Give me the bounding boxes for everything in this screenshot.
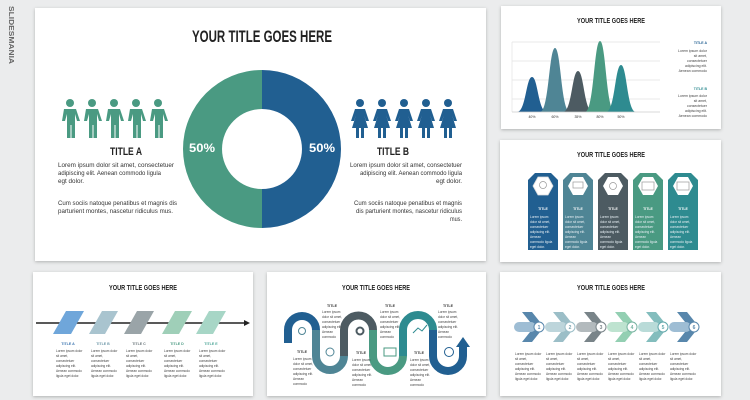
panel: ribbon timeline slide: consectetuer xyxy=(56,359,75,363)
step texts: ligula eget dolor. xyxy=(639,377,662,381)
chevrons: 4 xyxy=(631,325,634,331)
text block: title B: TITLE B xyxy=(377,146,409,158)
panel: hexagon cards slide: YOUR TITLE GOES HERE xyxy=(577,152,645,159)
labels: TITLE C xyxy=(132,342,146,346)
step texts: consectetuer xyxy=(438,320,457,324)
step texts: Aenean commodo xyxy=(639,372,665,376)
step texts: sit amet, xyxy=(515,357,527,361)
legend text: adipiscing elit. xyxy=(685,109,707,113)
step texts: consectetuer xyxy=(352,368,371,372)
panel: ribbon timeline slide: sit amet, xyxy=(91,354,103,358)
step texts: Lorem ipsum xyxy=(293,357,312,361)
panel: ribbon timeline slide: Lorem ipsum dolor xyxy=(199,349,226,353)
chevrons: 6 xyxy=(693,325,696,331)
panel: ribbon timeline slide: Aenean commodo xyxy=(91,369,117,373)
step texts: Aenean xyxy=(293,377,304,381)
step texts: Lorem ipsum dolor xyxy=(670,352,697,356)
cards: dolor sit amet, xyxy=(635,220,655,224)
text block: title B: egt dolor. xyxy=(436,179,462,185)
step texts: dolor sit amet, xyxy=(438,315,458,319)
legend text: sit amet, xyxy=(694,54,707,58)
step texts: consectetuer xyxy=(515,362,534,366)
panel: main slide xyxy=(35,8,486,261)
step texts: dolor sit amet, xyxy=(410,363,430,367)
panel: ribbon timeline slide: Lorem ipsum dolor xyxy=(164,349,191,353)
cards: dolor sit amet, xyxy=(600,220,620,224)
step texts: commodo xyxy=(438,335,452,339)
step texts: Lorem ipsum xyxy=(438,310,457,314)
panel: hexagon cards slide xyxy=(500,140,721,262)
cards: Aenean xyxy=(530,235,541,239)
chart: peaks: 50% xyxy=(617,115,625,119)
panel: ribbon timeline slide: ligula eget dolor. xyxy=(56,374,79,378)
step texts: ligula eget dolor. xyxy=(577,377,600,381)
step texts: TITLE xyxy=(297,350,308,354)
step texts: commodo xyxy=(380,335,394,339)
step texts: consectetuer xyxy=(608,362,627,366)
step texts: TITLE xyxy=(356,351,367,355)
donut chart xyxy=(183,70,341,228)
step texts: Aenean commodo xyxy=(546,372,572,376)
panel: wave process slide xyxy=(267,272,486,396)
text block: title A: parturient montes, nascetur ridiculus mus. xyxy=(58,209,173,215)
cards: Lorem ipsum xyxy=(635,215,654,219)
step texts: commodo xyxy=(352,383,366,387)
text block: title A xyxy=(58,146,177,215)
step texts: adipiscing elit. xyxy=(438,325,458,329)
donut chart: 50% xyxy=(309,141,335,155)
step texts: commodo xyxy=(410,383,424,387)
legend text: adipiscing elit. xyxy=(685,64,707,68)
cards: Aenean xyxy=(565,235,576,239)
step texts: Aenean xyxy=(322,330,333,334)
text block: title B: dis parturient montes, nascetur ridiculus xyxy=(356,209,462,215)
panel: chevron steps slide xyxy=(500,272,721,396)
panel: ribbon timeline slide: ligula eget dolor. xyxy=(126,374,149,378)
step texts: consectetuer xyxy=(293,367,312,371)
step texts: adipiscing elit. xyxy=(608,367,628,371)
step texts: consectetuer xyxy=(546,362,565,366)
panel: ribbon timeline slide: adipiscing elit. xyxy=(91,364,111,368)
panel: ribbon timeline slide: adipiscing elit. xyxy=(56,364,76,368)
cards: adipiscing elit. xyxy=(635,230,655,234)
panel: wave process slide: YOUR TITLE GOES HERE xyxy=(342,285,410,292)
panel: ribbon timeline slide: Lorem ipsum dolor xyxy=(126,349,153,353)
chart: peaks: 60% xyxy=(551,115,559,119)
step texts: Lorem ipsum dolor xyxy=(608,352,635,356)
panel: ribbon timeline slide: Aenean commodo xyxy=(164,369,190,373)
text block: title A: Cum sociis natoque penatibus et magnis dis xyxy=(58,201,177,207)
step texts: consectetuer xyxy=(577,362,596,366)
panel: ribbon timeline slide: adipiscing elit. xyxy=(164,364,184,368)
step texts: commodo xyxy=(293,382,307,386)
panel: ribbon timeline slide: sit amet, xyxy=(56,354,68,358)
panel: ribbon timeline slide: sit amet, xyxy=(164,354,176,358)
labels: TITLE A xyxy=(61,342,75,346)
cards: TITLE xyxy=(608,207,619,211)
panel: ribbon timeline slide xyxy=(33,272,253,396)
panel: ribbon timeline slide: ligula eget dolor. xyxy=(199,374,222,378)
cards: dolor sit amet, xyxy=(565,220,585,224)
labels: TITLE D xyxy=(170,342,184,346)
panel: ribbon timeline slide: Aenean commodo xyxy=(199,369,225,373)
step texts: dolor sit amet, xyxy=(322,315,342,319)
step texts: ligula eget dolor. xyxy=(546,377,569,381)
chevrons: 5 xyxy=(662,325,665,331)
step texts: ligula eget dolor. xyxy=(608,377,631,381)
panel: ribbon timeline slide: Lorem ipsum dolor xyxy=(91,349,118,353)
legend text: Lorem ipsum dolor xyxy=(678,94,708,98)
panel: ribbon timeline slide: sit amet, xyxy=(199,354,211,358)
cards: TITLE xyxy=(573,207,584,211)
cards: commodo ligula xyxy=(565,240,588,244)
panel: ribbon timeline slide: Aenean commodo xyxy=(126,369,152,373)
panel: ribbon timeline slide: consectetuer xyxy=(199,359,218,363)
cards: Lorem ipsum xyxy=(600,215,619,219)
step texts: Lorem ipsum dolor xyxy=(577,352,604,356)
text block: title B: adipiscing elit. Aenean commodo ligula xyxy=(360,171,463,177)
panel: ribbon timeline slide: adipiscing elit. xyxy=(199,364,219,368)
text block: title B: Lorem ipsum dolor sit amet, consectetuer xyxy=(350,163,462,169)
step texts: consectetuer xyxy=(670,362,689,366)
cards: commodo ligula xyxy=(670,240,693,244)
cards: dolor sit amet, xyxy=(670,220,690,224)
step texts: Aenean commodo xyxy=(608,372,634,376)
cards: TITLE xyxy=(538,207,549,211)
cards: adipiscing elit. xyxy=(670,230,690,234)
legend text: Lorem ipsum dolor xyxy=(678,49,708,53)
step texts: Lorem ipsum xyxy=(352,358,371,362)
panel: ribbon timeline slide: adipiscing elit. xyxy=(126,364,146,368)
cards: adipiscing elit. xyxy=(600,230,620,234)
panel: ribbon timeline slide: YOUR TITLE GOES HERE xyxy=(109,285,177,292)
cards: Aenean xyxy=(670,235,681,239)
panel: ribbon timeline slide: Aenean commodo xyxy=(56,369,82,373)
text block: title A: TITLE A xyxy=(110,146,142,158)
panel: ribbon timeline slide: consectetuer xyxy=(126,359,145,363)
step texts: TITLE xyxy=(414,351,425,355)
step texts: dolor sit amet, xyxy=(352,363,372,367)
cards: commodo ligula xyxy=(635,240,658,244)
step texts: Lorem ipsum xyxy=(322,310,341,314)
step texts xyxy=(515,352,697,381)
chevrons: 1 xyxy=(538,325,541,331)
step texts: adipiscing elit. xyxy=(639,367,659,371)
cards: adipiscing elit. xyxy=(565,230,585,234)
step texts: commodo xyxy=(322,335,336,339)
cards xyxy=(528,173,698,250)
donut chart: 50% xyxy=(189,141,215,155)
wave path xyxy=(288,315,463,371)
cards: eget dolor. xyxy=(600,245,615,249)
cards: commodo ligula xyxy=(530,240,553,244)
step texts: Lorem ipsum dolor xyxy=(515,352,542,356)
panel: peak chart slide xyxy=(501,6,721,129)
cards: dolor sit amet, xyxy=(530,220,550,224)
step texts: adipiscing elit. xyxy=(577,367,597,371)
chevrons: 2 xyxy=(569,325,572,331)
step texts: consectetuer xyxy=(322,320,341,324)
panel: peak chart slide: YOUR TITLE GOES HERE xyxy=(577,18,645,25)
cards: TITLE xyxy=(678,207,689,211)
panel: ribbon timeline slide: Lorem ipsum dolor xyxy=(56,349,83,353)
step texts: TITLE xyxy=(327,304,338,308)
legend text: consectetuer xyxy=(687,104,708,108)
step texts: consectetuer xyxy=(380,320,399,324)
chart: peaks: 80% xyxy=(596,115,604,119)
cards: consectetuer xyxy=(565,225,584,229)
step texts: adipiscing elit. xyxy=(380,325,400,329)
step texts: dolor sit amet, xyxy=(293,362,313,366)
step texts: sit amet, xyxy=(577,357,589,361)
chevrons: 3 xyxy=(600,325,603,331)
step texts: Lorem ipsum xyxy=(380,310,399,314)
step texts: Aenean xyxy=(410,378,421,382)
icon: women xyxy=(351,99,457,138)
cards: eget dolor. xyxy=(635,245,650,249)
step texts: consectetuer xyxy=(410,368,429,372)
cards: Lorem ipsum xyxy=(670,215,689,219)
labels: TITLE E xyxy=(204,342,218,346)
step texts: adipiscing elit. xyxy=(515,367,535,371)
step texts: Aenean xyxy=(380,330,391,334)
panel: ribbon timeline slide: sit amet, xyxy=(126,354,138,358)
cards: Lorem ipsum xyxy=(530,215,549,219)
step texts: dolor sit amet, xyxy=(380,315,400,319)
text block: title A: egt dolor. xyxy=(58,179,84,185)
panel: ribbon timeline slide: ligula eget dolor. xyxy=(91,374,114,378)
step texts: Aenean xyxy=(438,330,449,334)
icon: men xyxy=(62,99,168,138)
chart: peaks xyxy=(512,41,660,119)
arrowhead xyxy=(456,337,470,347)
step texts: Lorem ipsum xyxy=(410,358,429,362)
step texts: ligula eget dolor. xyxy=(670,377,693,381)
legend text: sit amet, xyxy=(694,99,707,103)
step texts: TITLE xyxy=(443,304,454,308)
legend text xyxy=(678,41,708,118)
cards: consectetuer xyxy=(670,225,689,229)
step texts: adipiscing elit. xyxy=(670,367,690,371)
step texts: adipiscing elit. xyxy=(352,373,372,377)
arrow line xyxy=(36,320,250,326)
step texts: TITLE xyxy=(385,304,396,308)
legend text: TITLE A xyxy=(694,41,707,45)
step texts: adipiscing elit. xyxy=(546,367,566,371)
step texts: ligula eget dolor. xyxy=(515,377,538,381)
step texts: sit amet, xyxy=(639,357,651,361)
cards: adipiscing elit. xyxy=(530,230,550,234)
text block: title B: Cum sociis natoque penatibus et magnis xyxy=(354,201,462,207)
cards: Aenean xyxy=(600,235,611,239)
step texts: Aenean commodo xyxy=(670,372,696,376)
step texts: Aenean commodo xyxy=(515,372,541,376)
labels: TITLE B xyxy=(96,342,110,346)
step texts: adipiscing elit. xyxy=(293,372,313,376)
panel: ribbon timeline slide: ligula eget dolor. xyxy=(164,374,187,378)
cards: TITLE xyxy=(643,207,654,211)
step texts: Aenean xyxy=(352,378,363,382)
cards: eget dolor. xyxy=(670,245,685,249)
step texts: adipiscing elit. xyxy=(322,325,342,329)
brand: vertical text: SLIDESMANIA xyxy=(7,6,14,64)
text block: title B xyxy=(350,146,463,223)
ribbons xyxy=(53,311,226,334)
step texts: sit amet, xyxy=(546,357,558,361)
step texts: Lorem ipsum dolor xyxy=(639,352,666,356)
chart: peaks: 35% xyxy=(574,115,582,119)
chart: peaks: 40% xyxy=(528,115,536,119)
cards: Aenean xyxy=(635,235,646,239)
text block: title A: adipiscing elit. Aenean commodo ligula xyxy=(58,171,162,177)
step texts: consectetuer xyxy=(639,362,658,366)
step texts: sit amet, xyxy=(670,357,682,361)
cards: Lorem ipsum xyxy=(565,215,584,219)
step texts xyxy=(293,304,458,387)
icons xyxy=(298,325,454,356)
chevrons xyxy=(514,312,699,342)
title: YOUR TITLE GOES HERE xyxy=(192,27,332,46)
panel: chevron steps slide: YOUR TITLE GOES HERE xyxy=(577,285,645,292)
panel: ribbon timeline slide: consectetuer xyxy=(164,359,183,363)
labels xyxy=(61,342,218,346)
cards: consectetuer xyxy=(530,225,549,229)
step texts: sit amet, xyxy=(608,357,620,361)
cards: consectetuer xyxy=(600,225,619,229)
step texts: adipiscing elit. xyxy=(410,373,430,377)
step texts: Lorem ipsum dolor xyxy=(546,352,573,356)
panel: ribbon timeline slide: consectetuer xyxy=(91,359,110,363)
cards: eget dolor. xyxy=(565,245,580,249)
legend text: TITLE B xyxy=(694,87,707,91)
legend text: Aenean commodo xyxy=(679,69,707,73)
legend text: consectetuer xyxy=(687,59,708,63)
cards: consectetuer xyxy=(635,225,654,229)
cards: eget dolor. xyxy=(530,245,545,249)
text block: title A: Lorem ipsum dolor sit amet, consectetuer xyxy=(58,163,174,169)
legend text: Aenean commodo xyxy=(679,114,707,118)
step texts: Aenean commodo xyxy=(577,372,603,376)
text block: title B: mus. xyxy=(450,217,462,223)
cards: commodo ligula xyxy=(600,240,623,244)
